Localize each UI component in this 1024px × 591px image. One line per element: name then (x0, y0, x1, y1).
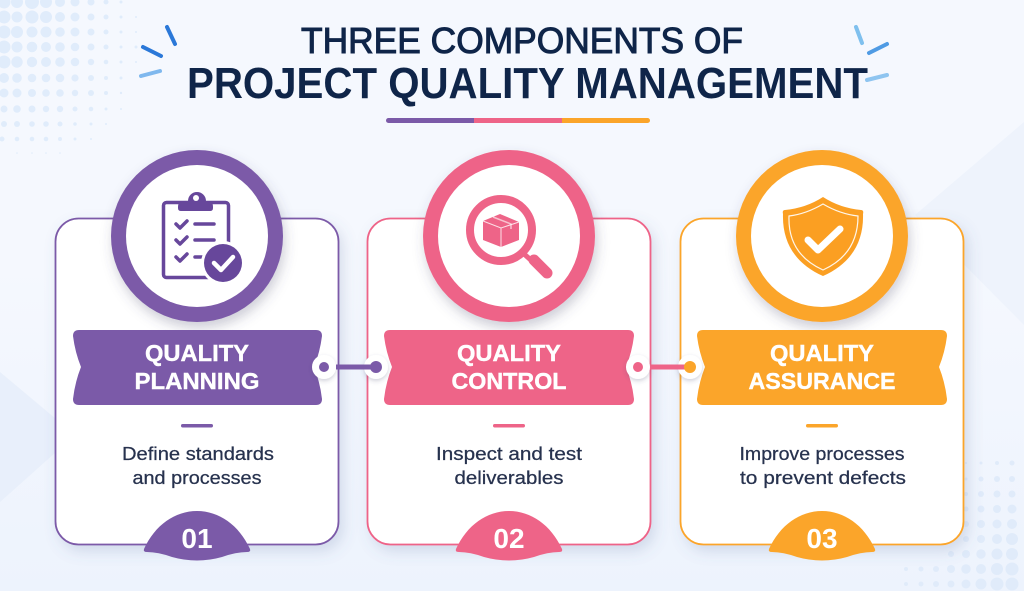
description (436, 444, 582, 488)
description: deliverables (454, 468, 564, 488)
number tab (456, 511, 562, 560)
ribbon label (748, 340, 896, 394)
connector: control to assurance (626, 355, 702, 379)
icon circle (736, 150, 908, 322)
ribbon label: CONTROL (452, 368, 566, 394)
description: to prevent defects (740, 468, 906, 488)
card outline (56, 218, 338, 544)
ribbon label (134, 340, 260, 394)
divider dash (181, 424, 213, 428)
number tab (144, 511, 250, 560)
number tab: 03 (806, 523, 838, 554)
ribbon label: QUALITY (457, 340, 561, 366)
decorative sparks left (141, 27, 175, 76)
icon: shield with check (783, 197, 863, 276)
ribbon (73, 330, 322, 405)
title: PROJECT QUALITY MANAGEMENT (187, 59, 868, 108)
ribbon label: QUALITY (770, 340, 874, 366)
ribbon label: PLANNING (134, 368, 260, 394)
ribbon label (452, 340, 566, 394)
icon circle (423, 150, 595, 322)
title underline (386, 118, 650, 123)
icon: clipboard with checks (164, 192, 245, 285)
description (122, 444, 274, 488)
divider dash (493, 424, 525, 428)
description (740, 444, 906, 488)
connector: planning to control (312, 355, 388, 379)
decorative sparks right (856, 27, 887, 80)
halftone dots top left (0, 0, 138, 154)
card outline (680, 218, 964, 544)
card outline (368, 218, 650, 544)
icon circle (111, 150, 283, 322)
icon: magnifier with box (470, 199, 547, 273)
divider dash (806, 424, 838, 428)
number tab (769, 511, 875, 560)
number tab: 02 (493, 523, 525, 554)
description: Define standards (122, 444, 274, 464)
ribbon (384, 330, 634, 405)
description: and processes (132, 468, 262, 488)
title: THREE COMPONENTS OF (301, 20, 743, 61)
panel: quality assurance (680, 150, 964, 560)
panel: quality planning (56, 150, 338, 560)
number tab: 01 (181, 523, 213, 554)
description: Improve processes (740, 444, 904, 464)
halftone dots bottom right (904, 460, 1018, 590)
description: Inspect and test (436, 444, 582, 464)
ribbon (697, 330, 947, 405)
ribbon label: QUALITY (145, 340, 249, 366)
panel: quality control (368, 150, 650, 560)
title (187, 20, 868, 108)
ribbon label: ASSURANCE (748, 368, 896, 394)
